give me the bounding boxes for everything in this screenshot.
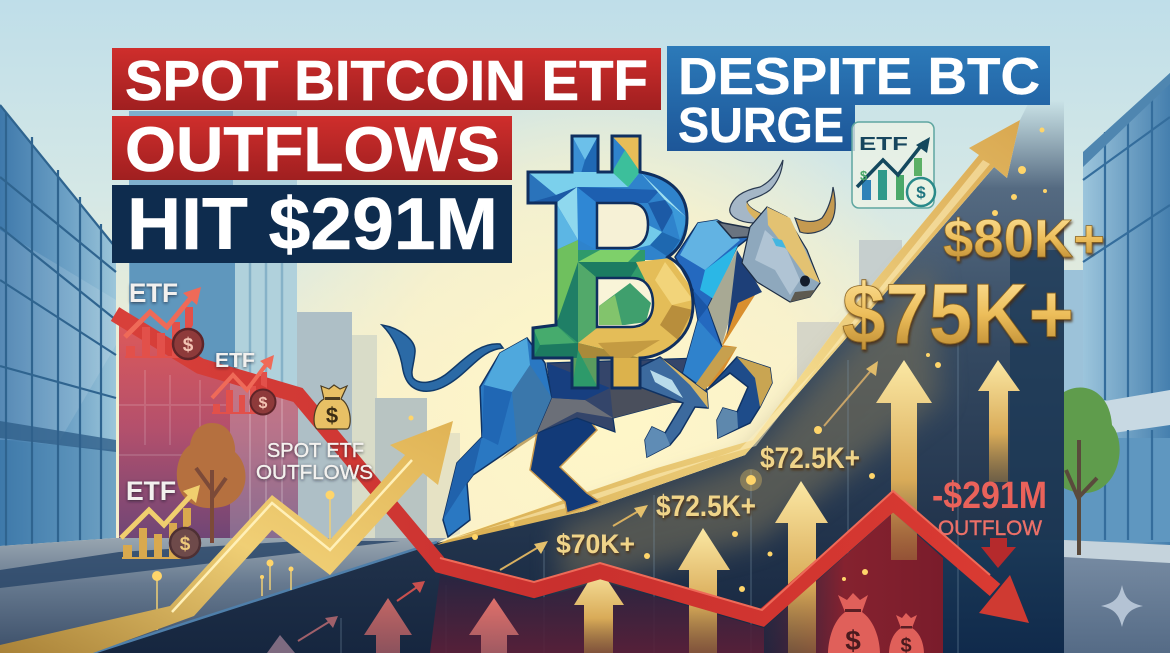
icon: ETF badge top right: $ xyxy=(860,168,868,183)
icon: red ETF chart large: ETF xyxy=(129,278,178,308)
outflow callout: -$291M xyxy=(932,475,1047,517)
glowing gold dots xyxy=(152,128,1047,630)
icon: gold ETF chart: $ xyxy=(180,534,191,555)
icon: gold ETF chart xyxy=(121,476,200,559)
subtitle: blue banner: SURGE xyxy=(678,99,844,153)
bull chest xyxy=(695,250,762,390)
tree left xyxy=(177,423,245,543)
up arrow 3 xyxy=(775,481,828,653)
outflow callout: OUTFLOW xyxy=(938,517,1042,540)
label: spot ETF outflows: OUTFLOWS xyxy=(256,462,373,484)
icon: ETF badge top right: $ xyxy=(916,183,926,202)
price label: $80K+: $80K+ xyxy=(943,209,1105,269)
small diagonal arrows xyxy=(298,361,878,641)
up arrow 2 xyxy=(978,360,1020,482)
price label: $70K+: $70K+ xyxy=(556,529,635,559)
bull front leg near xyxy=(640,357,708,457)
title: navy banner: HIT $291M xyxy=(127,184,498,265)
icon: gold money bag xyxy=(314,385,350,429)
icon: red ETF chart small: ETF xyxy=(215,350,255,372)
icon: red ETF chart small xyxy=(212,350,276,414)
price label: $75K+: $75K+ xyxy=(842,267,1074,362)
bull xyxy=(382,160,835,537)
subtitle: blue banner: DESPITE BTC xyxy=(678,48,1040,106)
ground right xyxy=(1064,540,1170,653)
left glass building xyxy=(0,105,116,546)
title: red banner line two: OUTFLOWS xyxy=(125,115,500,185)
red up arrow 1 xyxy=(469,598,519,653)
icon: red ETF chart small: $ xyxy=(259,395,268,412)
icon: gold money bag: $ xyxy=(326,403,338,428)
up arrow 5 xyxy=(574,566,624,653)
bull tail xyxy=(382,325,503,391)
icon: red ETF chart large xyxy=(125,278,203,359)
dark chart panel xyxy=(93,100,1064,653)
red up arrow 3 xyxy=(267,635,295,653)
bull belly xyxy=(537,357,707,433)
bitcoin upper counter xyxy=(597,203,648,248)
bitcoin lower counter xyxy=(597,278,653,327)
subtitle: blue banner xyxy=(667,46,1050,153)
bull ear xyxy=(718,222,750,238)
bull head xyxy=(742,207,820,302)
right glass building xyxy=(1064,73,1170,545)
label: spot ETF outflows: SPOT ETF xyxy=(267,440,364,462)
bull right horn xyxy=(795,187,835,233)
red building xyxy=(119,315,298,540)
icon: ETF badge top right: ETF xyxy=(859,134,908,154)
ground left xyxy=(0,538,450,653)
bitcoin symbol xyxy=(520,130,700,388)
rising gold up arrows xyxy=(267,360,1020,653)
sparkle icon xyxy=(1101,585,1143,627)
small red down arrow xyxy=(981,538,1016,568)
label: spot ETF outflows xyxy=(256,440,373,484)
icon: ETF badge top right xyxy=(852,122,935,208)
outflow callout xyxy=(932,475,1047,540)
bull left horn xyxy=(730,160,783,224)
up arrow 1 xyxy=(876,360,932,560)
rising gold zigzag arrow xyxy=(0,421,453,653)
tree right xyxy=(1064,387,1120,555)
bull rear haunch xyxy=(443,338,552,537)
up arrow 4 xyxy=(678,528,730,653)
icon: gold ETF chart: ETF xyxy=(126,476,176,506)
bull shoulder xyxy=(675,220,750,387)
red up arrow 2 xyxy=(364,598,412,653)
slope band under bull xyxy=(437,155,994,543)
background buildings xyxy=(129,111,902,540)
price label: $72.5K+ upper: $72.5K+ xyxy=(760,442,860,475)
title: red banner line one: SPOT BITCOIN ETF xyxy=(125,49,648,113)
bull rear leg xyxy=(530,403,600,513)
icon: red ETF chart large: $ xyxy=(183,335,194,356)
money bags red xyxy=(828,593,924,653)
falling red outflow arrow xyxy=(115,314,1029,623)
price label: $72.5K+ lower: $72.5K+ xyxy=(656,490,756,523)
big rising gold arrow xyxy=(437,120,1020,545)
bull front leg far xyxy=(707,357,772,438)
